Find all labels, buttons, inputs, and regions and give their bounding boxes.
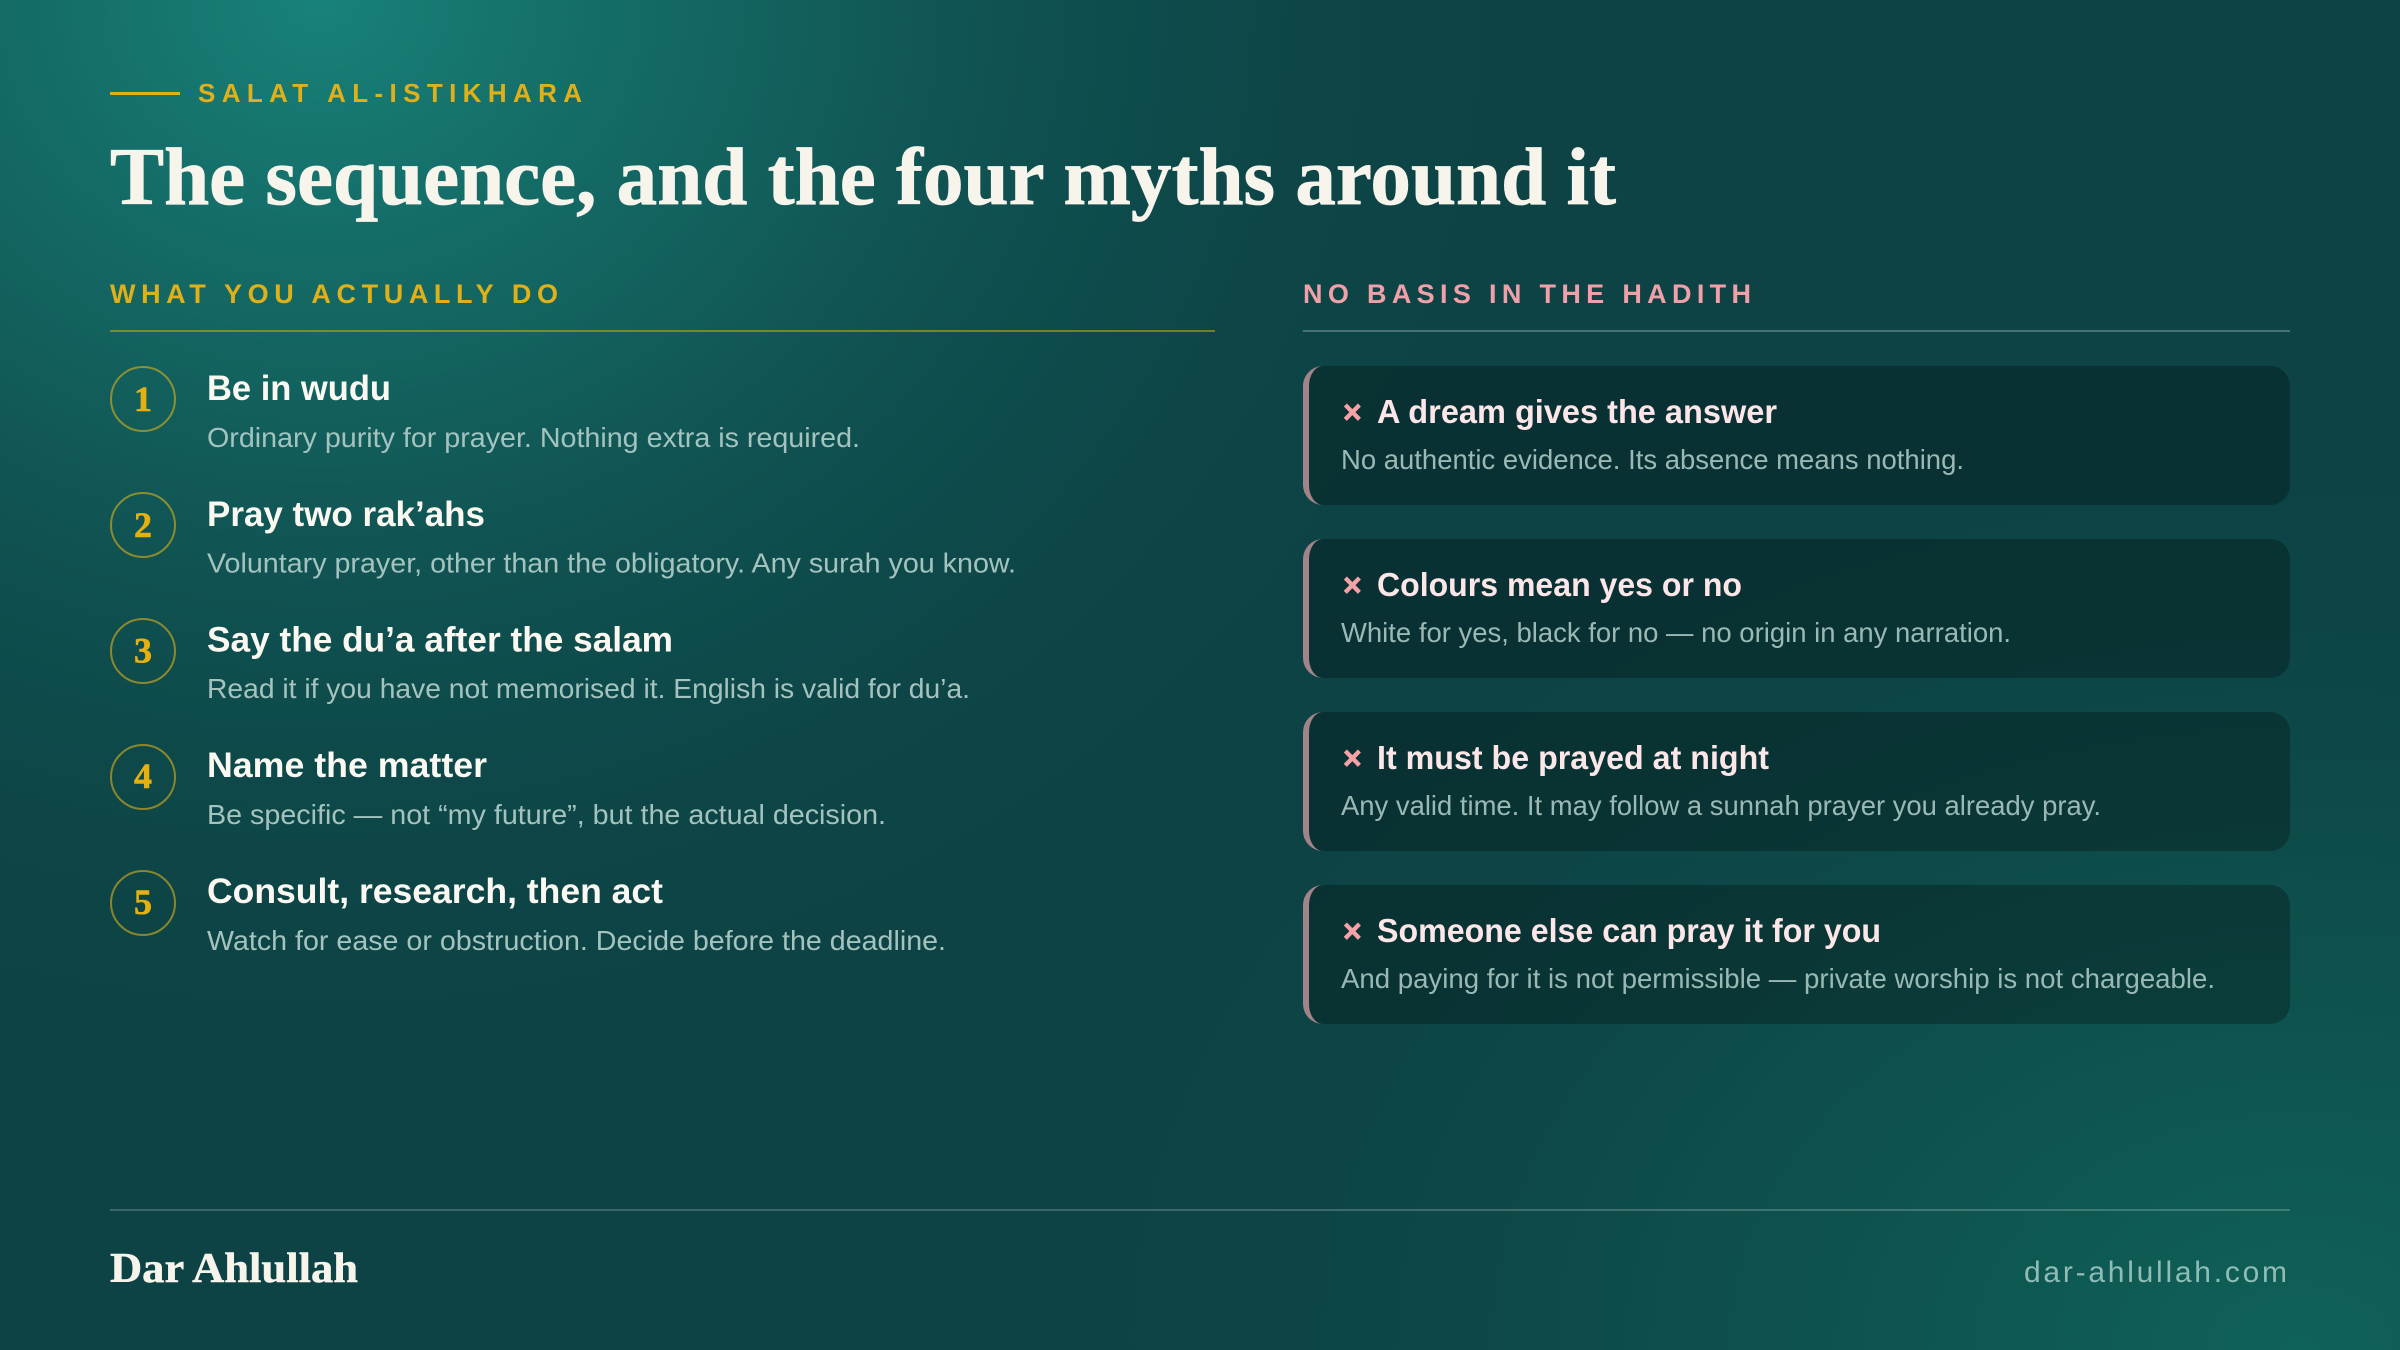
myth card 2: × <box>1343 567 1362 603</box>
heading: no basis in the hadith: NO BASIS IN THE HADITH <box>1303 279 1751 309</box>
heading: what you actually do: WHAT YOU ACTUALLY DO <box>110 279 558 309</box>
step 5: Consult, research, then act <box>207 872 663 911</box>
step 2: Pray two rak’ahs <box>207 495 485 534</box>
myth card 3 <box>1303 712 2290 851</box>
panel: myths <box>1303 366 2290 1024</box>
step 2: Voluntary prayer, other than the obligatory. Any surah you know. <box>207 548 1016 578</box>
brand name: Dar Ahlullah <box>110 1246 358 1292</box>
myth card 4: And paying for it is not permissible — private worship is not chargeable. <box>1341 963 2215 994</box>
myth card 1: No authentic evidence. Its absence means nothing. <box>1341 444 1964 475</box>
step 3: 3 <box>134 630 152 670</box>
eyebrow: SALAT AL-ISTIKHARA <box>198 78 582 108</box>
step 5: 5 <box>134 882 152 922</box>
website: dar-ahlullah.com <box>2024 1256 2287 1289</box>
step 3 <box>111 619 970 704</box>
myth card 4: × <box>1343 913 1362 949</box>
myth card 4: Someone else can pray it for you <box>1377 912 1881 949</box>
myth card 1 <box>1303 366 2290 505</box>
title: The sequence, and the four myths around it <box>110 131 1616 222</box>
step 2: 2 <box>134 505 152 545</box>
step 1 <box>111 367 860 453</box>
step 4: 4 <box>134 756 152 796</box>
step 5 <box>111 871 946 956</box>
myth card 3: Any valid time. It may follow a sunnah prayer you already pray. <box>1341 790 2101 821</box>
myth card 3: It must be prayed at night <box>1377 739 1769 776</box>
step 3: Read it if you have not memorised it. English is valid for du’a. <box>207 673 970 704</box>
step 1: 1 <box>134 379 152 419</box>
myth card 2: Colours mean yes or no <box>1377 566 1742 603</box>
myth card 4 <box>1303 885 2290 1024</box>
myth card 2: White for yes, black for no — no origin in any narration. <box>1341 617 2011 648</box>
step 5: Watch for ease or obstruction. Decide before the deadline. <box>207 925 946 956</box>
step 3: Say the du’a after the salam <box>207 620 673 660</box>
step 1: Be in wudu <box>207 369 391 408</box>
step 4 <box>111 745 886 830</box>
step 4: Name the matter <box>207 746 487 785</box>
step 1: Ordinary purity for prayer. Nothing extra is required. <box>207 422 860 453</box>
panel: steps <box>111 367 1016 956</box>
myth card 1: × <box>1343 394 1362 430</box>
myth card 2 <box>1303 539 2290 678</box>
step 2 <box>111 493 1016 578</box>
step 4: Be specific — not “my future”, but the actual decision. <box>207 799 886 830</box>
myth card 1: A dream gives the answer <box>1377 393 1777 430</box>
myth card 3: × <box>1343 740 1362 776</box>
